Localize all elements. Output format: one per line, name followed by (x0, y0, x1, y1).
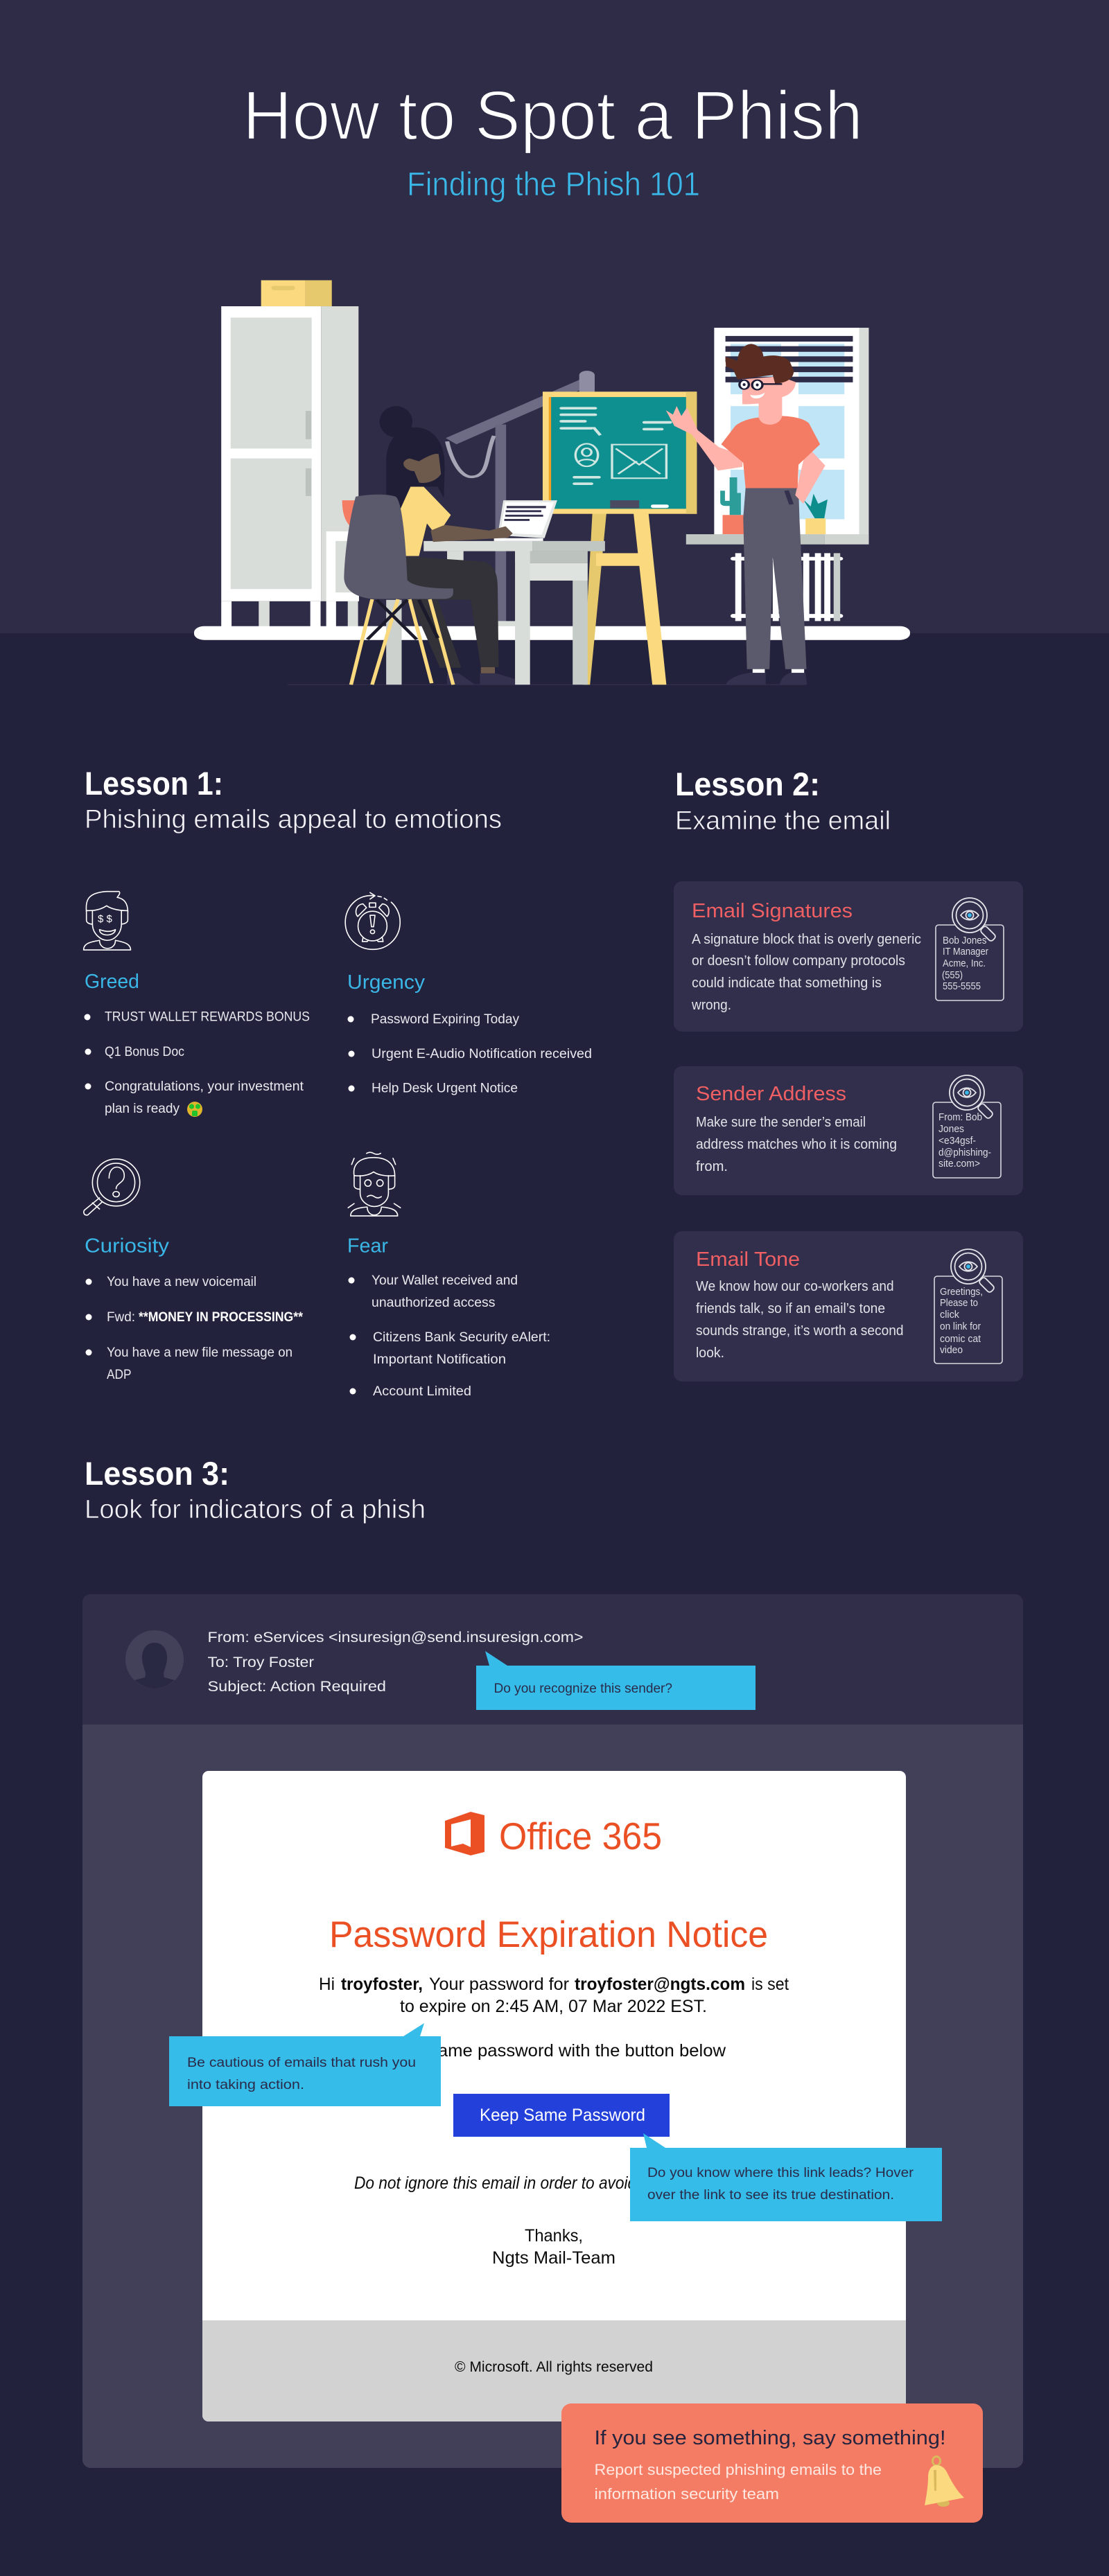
icon: fearful face (348, 1152, 401, 1216)
icon: office logo (445, 1812, 484, 1855)
text: email tone description: We know how our co-workers and (696, 1279, 894, 1294)
icon: signature sample with magnifier: IT Manager (943, 946, 988, 958)
panel: curiosity (84, 1159, 304, 1382)
list: urgency subject lines (348, 1012, 592, 1096)
list: urgency subject lines: Urgent E-Audio Notification received (372, 1047, 592, 1061)
text: warning: Do not ignore this email in order to avoid losing your access (354, 2173, 770, 2193)
subheading: lesson 1: Phishing emails appeal to emotions (85, 805, 502, 834)
panel: sender address (674, 1066, 1023, 1195)
icon: laptop (494, 500, 557, 541)
subtitle: Finding the Phish 101 (407, 166, 700, 203)
subheading: lesson 3: Look for indicators of a phish (85, 1495, 426, 1524)
icon: sender sample with magnifier: <e34gsf- (938, 1136, 976, 1147)
heading: email tone: Email Tone (696, 1249, 800, 1271)
callout: recognize sender: Do you recognize this sender? (494, 1682, 672, 1696)
heading: email signatures: Email Signatures (692, 900, 853, 922)
icon: easel with chalkboard (543, 391, 697, 685)
heading: lesson 2: Lesson 2: (675, 766, 820, 802)
icon: dollar eyes: $ $ (98, 913, 113, 925)
text: email signatures description: A signature block that is overly generic (692, 932, 921, 947)
text: email greeting: is set (751, 1975, 789, 1994)
text: email tone description: sounds strange, it’s worth a second (696, 1323, 904, 1339)
list: urgency subject lines: Password Expiring Today (371, 1012, 519, 1027)
email footer (202, 2320, 906, 2421)
panel: urgency (345, 892, 592, 1096)
icon: sender sample with magnifier: Jones (938, 1124, 964, 1135)
text: email signatures description: wrong. (691, 998, 731, 1013)
text: email greeting: troyfoster@ngts.com (575, 1975, 745, 1994)
text: email from, to, subject: Subject: Action Required (208, 1679, 386, 1695)
text: email greeting (319, 1975, 789, 2016)
button: keep same password (453, 2094, 670, 2137)
icon: tone sample with magnifier (934, 1249, 1002, 1364)
panel: email signatures (674, 881, 1023, 1032)
icon: radiator (731, 553, 843, 621)
icon: sender avatar (125, 1630, 184, 1688)
icon: signature sample with magnifier (936, 898, 1004, 1000)
icon: tone sample with magnifier: Please to (940, 1298, 978, 1309)
icon: signature sample with magnifier: Acme, Inc. (943, 958, 986, 969)
icon: signature sample with magnifier: 555-5555 (943, 981, 981, 992)
email header (82, 1594, 1023, 1724)
text: email from, to, subject (208, 1630, 584, 1695)
list: fear subject lines: Citizens Bank Security eAlert: (373, 1330, 550, 1345)
text: email tone description (696, 1279, 904, 1361)
list: greed subject lines (85, 1010, 310, 1116)
icon: money mouth emoji (187, 1102, 202, 1117)
text: keep password instruction: Keep same password with the button below (383, 2041, 726, 2061)
heading: password expiration notice: Password Expiration Notice (329, 1914, 768, 1955)
text: email signatures description: or doesn’t follow company protocols (692, 953, 905, 969)
floor (194, 626, 910, 640)
text: email tone description: look. (696, 1346, 724, 1361)
text: email greeting: to expire on 2:45 AM, 07 Mar 2022 EST. (400, 1997, 707, 2016)
callout: recognize sender (476, 1651, 756, 1710)
text: report instruction: information security team (595, 2485, 779, 2503)
heading: sender address: Sender Address (696, 1083, 846, 1105)
list: greed subject lines: Q1 Bonus Doc (105, 1045, 184, 1059)
list: urgency subject lines: Help Desk Urgent Notice (372, 1081, 518, 1096)
callout: link destination: Do you know where this link leads? Hover (647, 2166, 914, 2180)
list: curiosity subject lines: You have a new voicemail (107, 1275, 256, 1289)
heading: greed: Greed (85, 971, 139, 993)
list: fear subject lines: Important Notification (373, 1352, 506, 1367)
text: email greeting: Hi (319, 1975, 335, 1994)
text: report instruction (595, 2461, 882, 2503)
icon: sender sample with magnifier (933, 1075, 1001, 1178)
list: curiosity subject lines: ADP (107, 1368, 132, 1382)
icon: signature sample with magnifier: (555) (942, 970, 963, 981)
panel: report callout (561, 2403, 983, 2523)
callout: rushed action: Be cautious of emails that rush you (187, 2056, 416, 2070)
heading: curiosity: Curiosity (85, 1235, 170, 1257)
heading: fear: Fear (347, 1235, 388, 1257)
icon: signature sample with magnifier: Bob Jones (943, 935, 987, 946)
panel: email tone (674, 1231, 1023, 1382)
text: email from, to, subject: To: Troy Foster (208, 1655, 314, 1670)
icon: bell (925, 2457, 964, 2507)
section: lesson 2 (674, 766, 1023, 1382)
icon: sender sample with magnifier: site.com> (938, 1158, 980, 1170)
text: sender address description: address matches who it is coming (696, 1137, 897, 1152)
list: greed subject lines: Congratulations, your investment (105, 1079, 304, 1094)
list: greed subject lines: TRUST WALLET REWARDS BONUS (105, 1010, 310, 1024)
text: sign off (492, 2226, 615, 2268)
email footer: © Microsoft. All rights reserved (455, 2359, 653, 2375)
callout: rushed action (169, 2023, 441, 2106)
panel: fear (347, 1152, 550, 1399)
text: sender address description: Make sure the sender’s email (696, 1115, 866, 1130)
callout: link destination (630, 2133, 942, 2221)
icon: woman at desk (380, 406, 515, 685)
text: report instruction: Report suspected phishing emails to the (595, 2461, 882, 2478)
text: sign off: Thanks, (525, 2226, 583, 2246)
icon: sender sample with magnifier: From: Bob (938, 1112, 982, 1123)
icon: alarm clock (345, 892, 400, 949)
text: sign off: Ngts Mail-Team (492, 2248, 615, 2268)
text: sender address description: from. (696, 1159, 728, 1174)
list: fear subject lines (348, 1273, 550, 1399)
heading: lesson 1: Lesson 1: (85, 765, 223, 802)
logo wordmark: Office 365 (499, 1815, 662, 1858)
text: email tone description: friends talk, so if an email’s tone (696, 1301, 885, 1316)
icon: sender sample with magnifier: d@phishing- (938, 1147, 991, 1158)
text: email greeting: troyfoster, (341, 1975, 423, 1994)
text: sender address description (696, 1115, 897, 1174)
subheading: lesson 2: Examine the email (675, 806, 891, 836)
icon: chair (344, 495, 453, 685)
text: email greeting: Your password for (429, 1975, 569, 1994)
section: lesson 3 (82, 1455, 1023, 2523)
list: greed subject lines: plan is ready (105, 1102, 180, 1116)
icon: tone sample with magnifier: Greetings, (940, 1287, 983, 1298)
section: lesson 1 (84, 765, 592, 1399)
list: curiosity subject lines: Fwd: (107, 1310, 135, 1325)
icon: cabinet (221, 280, 359, 627)
list: curiosity subject lines (86, 1275, 304, 1382)
callout: rushed action: into taking action. (187, 2078, 304, 2092)
email body card (202, 1771, 906, 2421)
icon: lamp arm (446, 371, 595, 627)
button: keep same password: Keep Same Password (480, 2106, 645, 2125)
text: email signatures description (691, 932, 921, 1013)
icon: man pointing at board (666, 344, 826, 685)
list: fear subject lines: Your Wallet received and (372, 1273, 518, 1288)
icon: window (686, 328, 868, 545)
title: How to Spot a Phish (243, 77, 863, 155)
icon: desk (386, 541, 605, 685)
text: email signatures description: could indicate that something is (692, 976, 882, 991)
icon: tone sample with magnifier: comic cat (940, 1334, 981, 1345)
heading: say something: If you see something, say something! (595, 2427, 945, 2449)
panel: example email (82, 1594, 1023, 2468)
text: email from, to, subject: From: eServices <insuresign@send.insuresign.com> (208, 1630, 584, 1646)
illustration: office scene (194, 280, 910, 685)
icon: tone sample with magnifier: on link for (940, 1321, 981, 1332)
icon: magnifier with question mark (84, 1159, 140, 1215)
panel: greed (84, 892, 310, 1117)
heading: lesson 3: Lesson 3: (85, 1455, 229, 1492)
list: fear subject lines: unauthorized access (372, 1296, 495, 1310)
callout: link destination: over the link to see its true destination. (647, 2188, 894, 2203)
icon: tone sample with magnifier: click (940, 1309, 960, 1321)
heading: urgency: Urgency (347, 971, 426, 994)
list: curiosity subject lines: **MONEY IN PROCESSING** (139, 1310, 304, 1325)
list: fear subject lines: Account Limited (373, 1384, 471, 1399)
list: curiosity subject lines: You have a new file message on (107, 1346, 292, 1360)
icon: greedy face (84, 892, 130, 950)
icon: tone sample with magnifier: video (940, 1345, 963, 1356)
